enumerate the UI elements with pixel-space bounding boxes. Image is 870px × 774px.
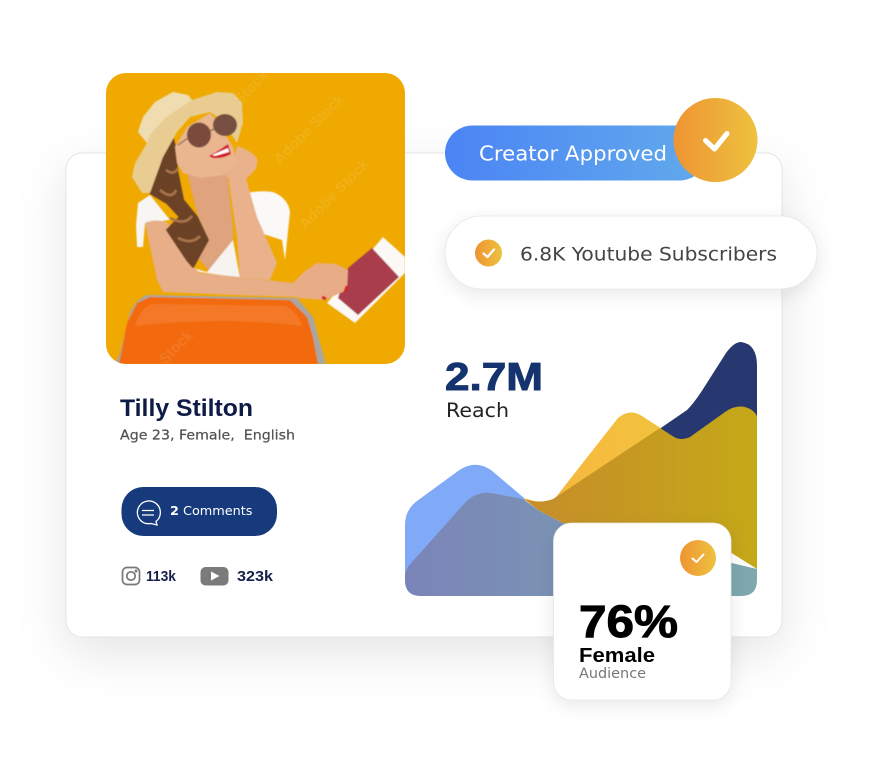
left arm — [145, 220, 300, 297]
comments button — [122, 487, 277, 536]
infographic canvas — [55, 73, 820, 708]
shirt centre — [190, 240, 240, 278]
chin hand — [226, 146, 257, 180]
neck and chest — [187, 172, 233, 272]
audience percentage: 76% — [579, 596, 678, 647]
audience label: Audience — [579, 666, 646, 682]
subscribers label: 6.8K Youtube Subscribers — [520, 244, 777, 266]
hand on passport — [293, 263, 348, 300]
stock watermark: Adobe Stock — [271, 91, 348, 168]
panel: main profile card — [66, 153, 782, 637]
area: blue overlap — [405, 493, 757, 596]
reach label: Reach — [446, 399, 509, 422]
instagram stat — [122, 568, 177, 585]
shirt left sleeve — [136, 195, 170, 247]
profile name: Tilly Stilton — [120, 395, 253, 422]
area chart — [405, 342, 757, 596]
comments label: 2 Comments — [170, 503, 252, 518]
profile details: Age 23, Female, English — [120, 428, 295, 444]
area: light blue — [405, 465, 560, 596]
area: navy — [655, 342, 757, 445]
shirt right sleeve — [247, 191, 290, 260]
icon: instagram — [122, 568, 140, 584]
forearm — [228, 175, 277, 280]
stock watermark: Stock — [231, 66, 272, 108]
audience gender: Female — [579, 644, 655, 667]
badge: creator approved — [445, 98, 758, 182]
suitcase body — [119, 297, 318, 364]
suitcase rim — [115, 295, 326, 364]
stock watermark — [156, 66, 373, 368]
badge: youtube subscribers — [445, 216, 817, 289]
photo: traveller with suitcase — [106, 66, 405, 368]
icon: speech bubble — [137, 501, 160, 525]
youtube stat — [200, 567, 274, 586]
badge label: Creator Approved — [479, 142, 667, 166]
icon: audience check circle — [680, 540, 716, 576]
youtube count: 323k — [237, 568, 274, 585]
stock watermark: Stock — [156, 326, 197, 368]
area: light yellow — [523, 412, 662, 510]
hat — [132, 92, 243, 193]
hair — [150, 135, 208, 267]
instagram count: 113k — [146, 568, 177, 585]
panel: female audience — [554, 523, 731, 700]
icon: large check circle — [674, 98, 758, 182]
icon: small check circle — [475, 240, 502, 266]
face — [175, 113, 237, 178]
stock watermark: Adobe Stock — [296, 156, 373, 233]
icon: youtube — [200, 567, 228, 586]
passport — [327, 237, 405, 323]
reach figure: 2.7M — [445, 356, 543, 399]
sunglasses — [178, 114, 237, 148]
area: dark yellow — [524, 407, 757, 569]
lips — [209, 144, 231, 158]
